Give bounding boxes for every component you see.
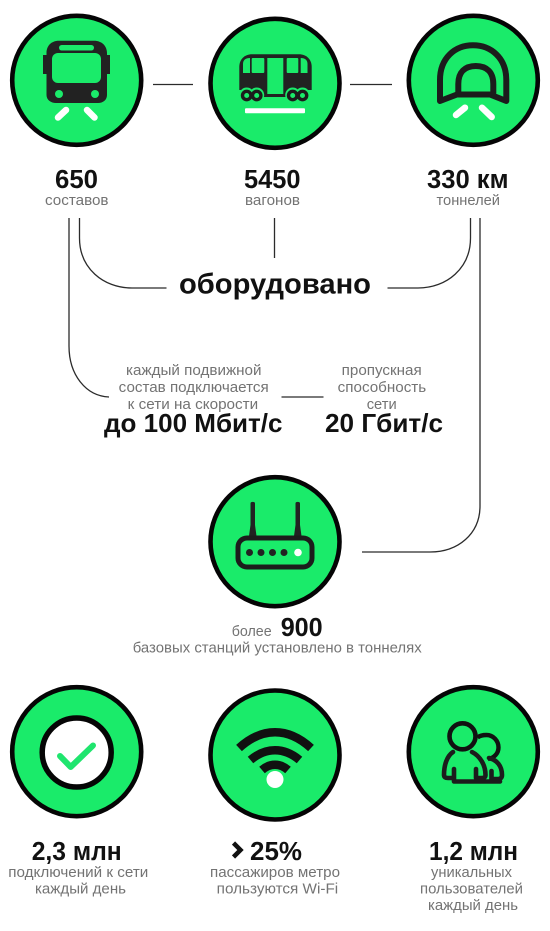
label: пользователей: пользователей xyxy=(420,880,523,898)
label: вагонов: вагонов xyxy=(245,192,300,209)
icon: tunnel xyxy=(409,16,538,145)
label: каждый день: каждый день xyxy=(35,880,126,898)
label: более: более xyxy=(232,623,272,640)
text block: пропускная способность: 20 Гбит/с xyxy=(325,408,443,438)
panel: connections xyxy=(8,687,148,898)
value: 25%: 25% xyxy=(250,838,302,866)
panel: tunnels xyxy=(409,16,538,209)
label: каждый день: каждый день xyxy=(428,897,518,914)
icon: check mark xyxy=(12,687,141,816)
text block: пропускная способность: пропускная xyxy=(342,362,422,379)
icon: users xyxy=(409,687,538,816)
value: 5450: 5450 xyxy=(244,166,300,194)
value: 900: 900 xyxy=(281,614,323,642)
panel: unique users xyxy=(409,687,538,914)
icon: wifi xyxy=(210,690,340,820)
value: 330 км: 330 км xyxy=(427,166,508,194)
text block: пропускная способность xyxy=(325,362,443,438)
label: тоннелей: тоннелей xyxy=(436,192,500,209)
icon: train front xyxy=(12,16,141,145)
connector lines xyxy=(69,84,480,552)
text block: скорость подключения: к сети на скорости xyxy=(128,396,258,413)
value: 1,2 млн: 1,2 млн xyxy=(429,838,518,866)
label: пользуются Wi-Fi: пользуются Wi-Fi xyxy=(217,880,338,898)
value: 650: 650 xyxy=(55,166,98,194)
text block: скорость подключения: каждый подвижной xyxy=(126,362,262,379)
label: пассажиров метро: пассажиров метро xyxy=(210,864,340,881)
panel: base stations xyxy=(133,477,422,656)
panel: cars xyxy=(210,19,340,209)
label: базовых станций: базовых станций установлено в тоннелях xyxy=(133,640,422,656)
icon: greater-than chevron xyxy=(234,843,240,857)
label: подключений: подключений к сети xyxy=(8,864,148,881)
label: составов: составов xyxy=(45,192,109,209)
label: уникальных: уникальных xyxy=(431,864,512,881)
heading: оборудовано: оборудовано xyxy=(179,268,371,300)
value: 2,3 млн: 2,3 млн xyxy=(32,838,122,866)
text block: пропускная способность: сети xyxy=(367,396,397,413)
panel: wifi share xyxy=(210,690,340,898)
text block: скорость подключения xyxy=(104,362,282,438)
text block: скорость подключения: до 100 Мбит/с xyxy=(104,408,282,438)
icon: router xyxy=(210,477,340,606)
icon: metro car xyxy=(210,19,340,148)
text block: пропускная способность: способность xyxy=(338,379,426,396)
panel: trains xyxy=(12,16,141,209)
text block: скорость подключения: состав подключается xyxy=(119,379,269,396)
